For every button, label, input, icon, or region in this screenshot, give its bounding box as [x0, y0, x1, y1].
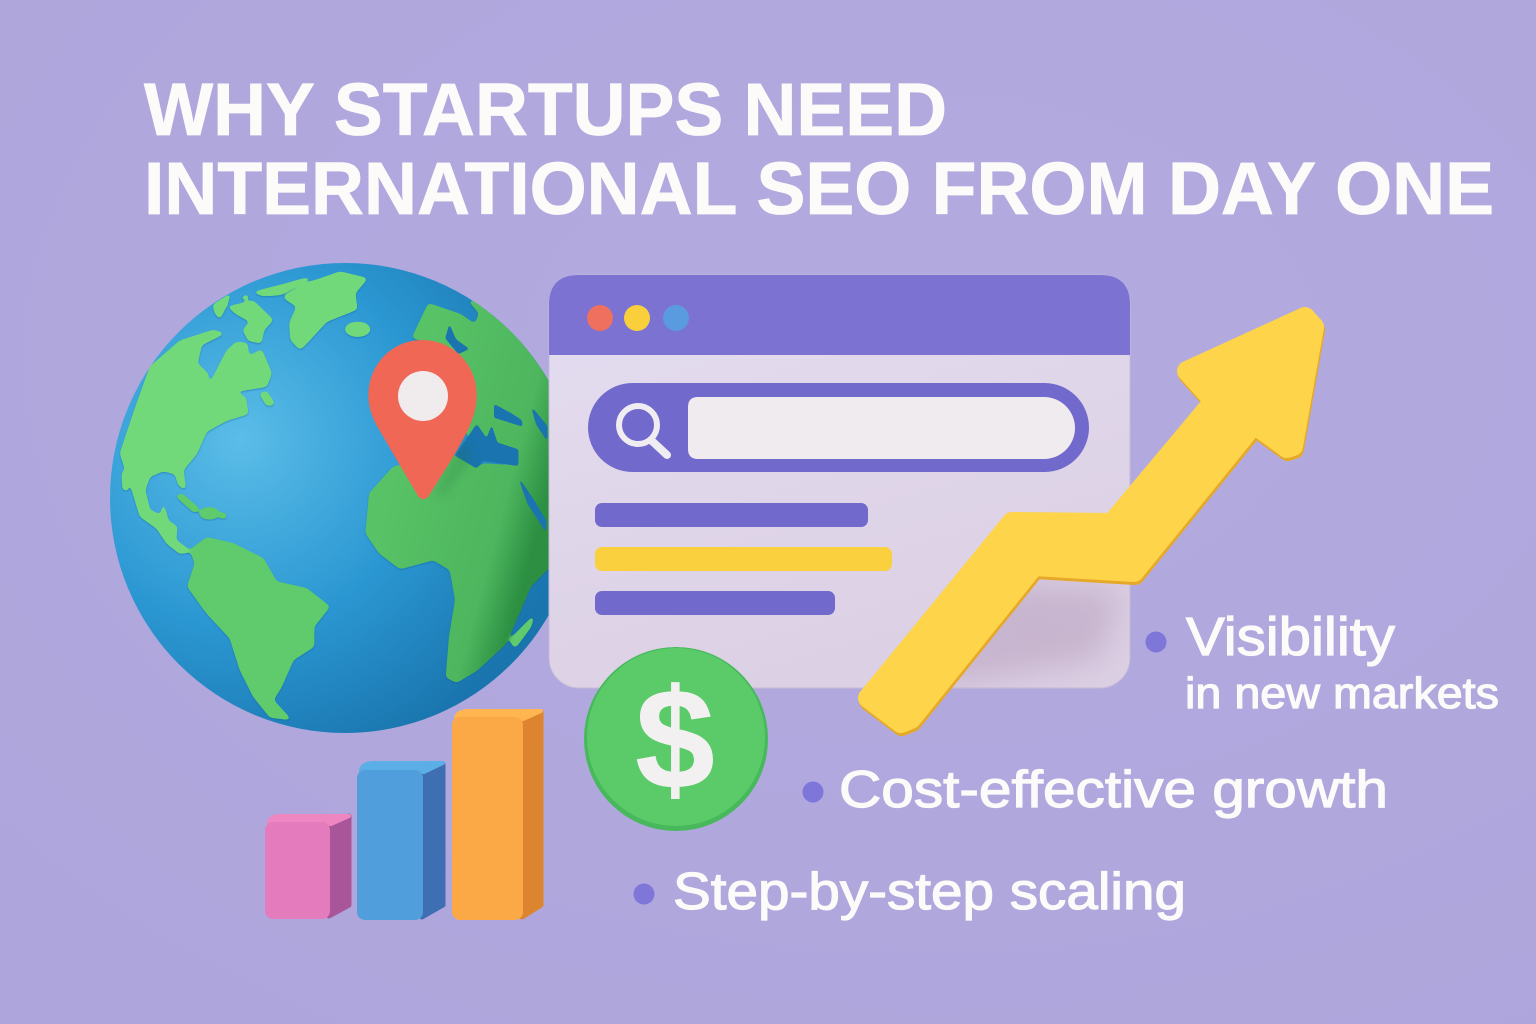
title: INTERNATIONAL SEO FROM DAY ONE [144, 147, 1494, 230]
orange bar [452, 711, 541, 920]
title: WHY STARTUPS NEED [144, 68, 947, 151]
bullet: visibility: in new markets [1185, 669, 1499, 718]
bar chart [265, 711, 541, 920]
title [144, 68, 1494, 230]
bullet: step-by-step scaling: Step-by-step scaling [673, 863, 1186, 921]
icon: dollar coin [584, 647, 768, 831]
pink bar [265, 816, 349, 919]
icon: growth arrow [868, 317, 1315, 726]
bullet: visibility [1146, 607, 1499, 718]
window header [549, 275, 1130, 355]
window buttons [587, 305, 689, 331]
result lines [595, 503, 892, 615]
bullet: visibility: Visibility [1186, 607, 1395, 667]
icon: location pin [368, 340, 477, 499]
blue bar [357, 763, 443, 920]
icon: magnifier [619, 406, 667, 455]
icon: globe [110, 263, 580, 733]
icon: dollar coin: $ [636, 660, 714, 819]
panel: browser window [549, 275, 1130, 690]
bullet: cost-effective growth: Cost-effective growth [839, 761, 1388, 819]
search bar [588, 383, 1089, 472]
